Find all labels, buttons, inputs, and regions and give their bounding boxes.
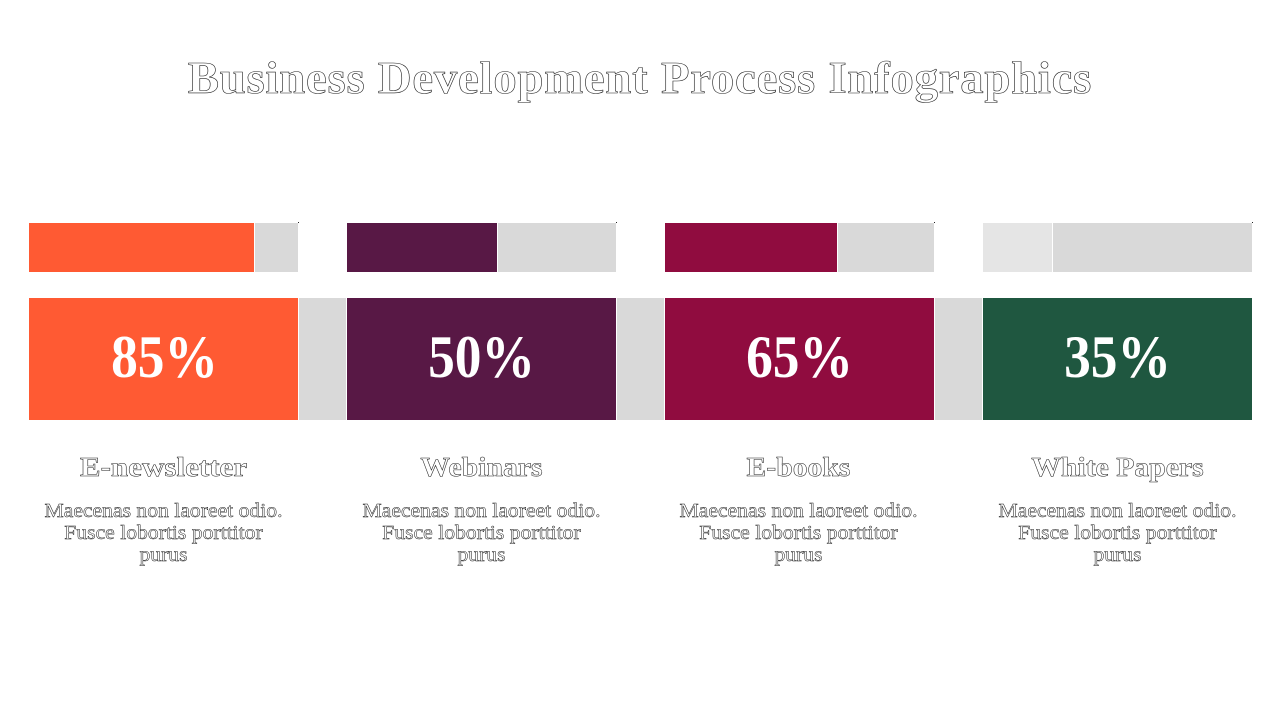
panel: E-newsletter (29, 223, 346, 566)
title: Business Development Process Infographics (188, 53, 1092, 103)
description: Maecenas non laoreet odio. (998, 501, 1236, 522)
description: Maecenas non laoreet odio. (362, 501, 600, 522)
description: Fusce lobortis porttitor (1018, 523, 1217, 544)
value card: 35%: 35% (1064, 324, 1171, 390)
spacer block (935, 298, 982, 420)
heading: Webinars (420, 452, 543, 482)
value card: 50%: 50% (428, 324, 535, 390)
description: Fusce lobortis porttitor (699, 523, 898, 544)
progress bar: White Papers 35% (983, 223, 1252, 272)
description: Fusce lobortis porttitor (64, 523, 263, 544)
value card: 35% (983, 298, 1252, 420)
description: purus (774, 545, 823, 566)
heading: E-books (746, 452, 850, 482)
value card: 85% (29, 298, 298, 420)
description (998, 501, 1236, 566)
value card: 65% (665, 298, 934, 420)
description: Maecenas non laoreet odio. (44, 501, 282, 522)
progress bar: E-books 65% (665, 223, 934, 272)
description: purus (139, 545, 188, 566)
description (679, 501, 917, 566)
value card: 85%: 85% (111, 324, 218, 390)
description: purus (1093, 545, 1142, 566)
description: Fusce lobortis porttitor (382, 523, 581, 544)
heading: White Papers (1031, 452, 1204, 482)
description (44, 501, 282, 566)
description: Maecenas non laoreet odio. (679, 501, 917, 522)
panel: White Papers (983, 223, 1252, 566)
spacer block (299, 298, 346, 420)
heading: E-newsletter (80, 452, 247, 482)
progress bar: E-newsletter 85% (29, 223, 298, 272)
panel: Webinars (347, 223, 664, 566)
description: purus (457, 545, 506, 566)
value card: 50% (347, 298, 616, 420)
value card: 65%: 65% (746, 324, 853, 390)
panel: E-books (665, 223, 982, 566)
progress bar: Webinars 50% (347, 223, 616, 272)
spacer block (617, 298, 664, 420)
description (362, 501, 600, 566)
